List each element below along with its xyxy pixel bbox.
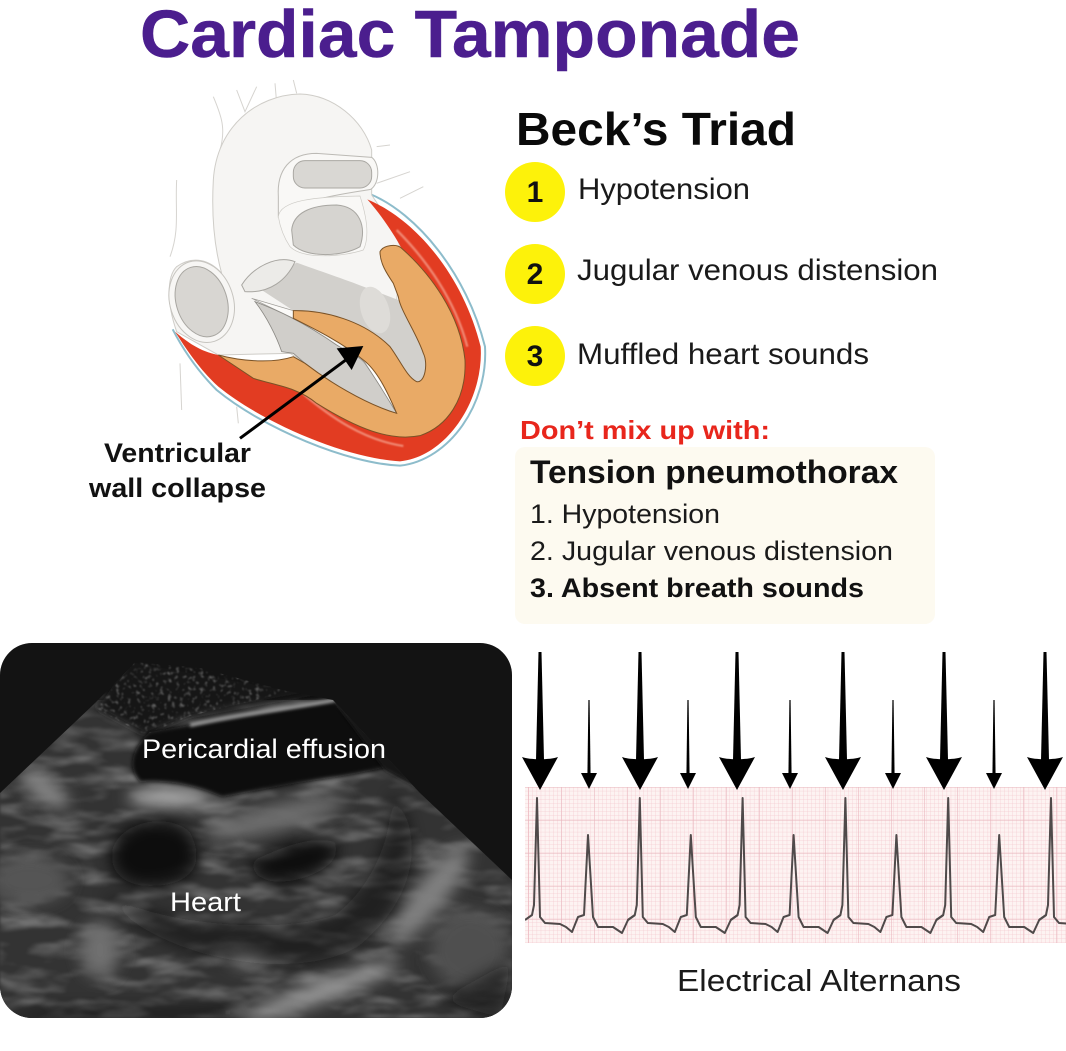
highlight on the red layer	[303, 230, 467, 446]
triad item 2	[505, 244, 938, 304]
upper ventricle cavity	[262, 263, 426, 382]
triad item 2: 2	[527, 258, 543, 291]
triad item 3	[505, 326, 869, 386]
heading: Beck's Triad: Beck’s Triad	[516, 103, 796, 155]
triad item 2: Jugular venous distension	[577, 254, 938, 287]
large arrows: tall QRS beats	[522, 652, 1063, 790]
panel: ultrasound image	[0, 643, 512, 1030]
pale heart body	[169, 94, 427, 413]
callout arrow	[240, 346, 363, 438]
pericardial effusion red layer	[175, 199, 481, 461]
papillary muscle	[354, 283, 396, 337]
small arrows: short QRS beats	[581, 700, 1002, 789]
triad item 3: 3	[527, 340, 543, 373]
callout label: wall collapse	[88, 473, 266, 503]
panel: tension pneumothorax: Tension pneumothorax	[530, 454, 898, 490]
callout label: Ventricular	[104, 438, 252, 468]
ECG strip	[525, 787, 1066, 943]
ultrasound sector	[0, 650, 512, 1030]
triad item 3: Muffled heart sounds	[577, 338, 869, 371]
label: pericardial effusion: Pericardial effusion	[142, 734, 386, 764]
triad item 1: 1	[527, 176, 543, 209]
heart illustration	[159, 80, 485, 466]
white membrane along the septum	[252, 298, 293, 318]
pericardial sac outline	[173, 194, 485, 466]
myocardium wall	[218, 245, 465, 437]
pericardial effusion dark area	[133, 700, 395, 797]
ECG caption: Electrical Alternans	[677, 963, 961, 998]
panel: tension pneumothorax: 2. Jugular venous distension	[530, 536, 893, 566]
bright pericardium streak	[190, 700, 335, 725]
panel: tension pneumothorax	[515, 447, 935, 624]
triad item 1	[505, 162, 750, 222]
right ventricle cavity	[255, 302, 397, 413]
dim haze at top of the sector	[93, 670, 300, 736]
atrium and vessel openings	[159, 153, 378, 351]
top speckle	[98, 662, 287, 734]
triad item 1: Hypotension	[578, 173, 750, 206]
callout label	[88, 438, 266, 503]
panel: tension pneumothorax: 1. Hypotension	[530, 499, 720, 529]
great vessel sketch lines	[170, 80, 423, 423]
warning label: Don’t mix up with:	[520, 415, 770, 445]
panel: tension pneumothorax: 3. Absent breath sounds	[530, 573, 864, 603]
label: heart: Heart	[170, 887, 242, 917]
